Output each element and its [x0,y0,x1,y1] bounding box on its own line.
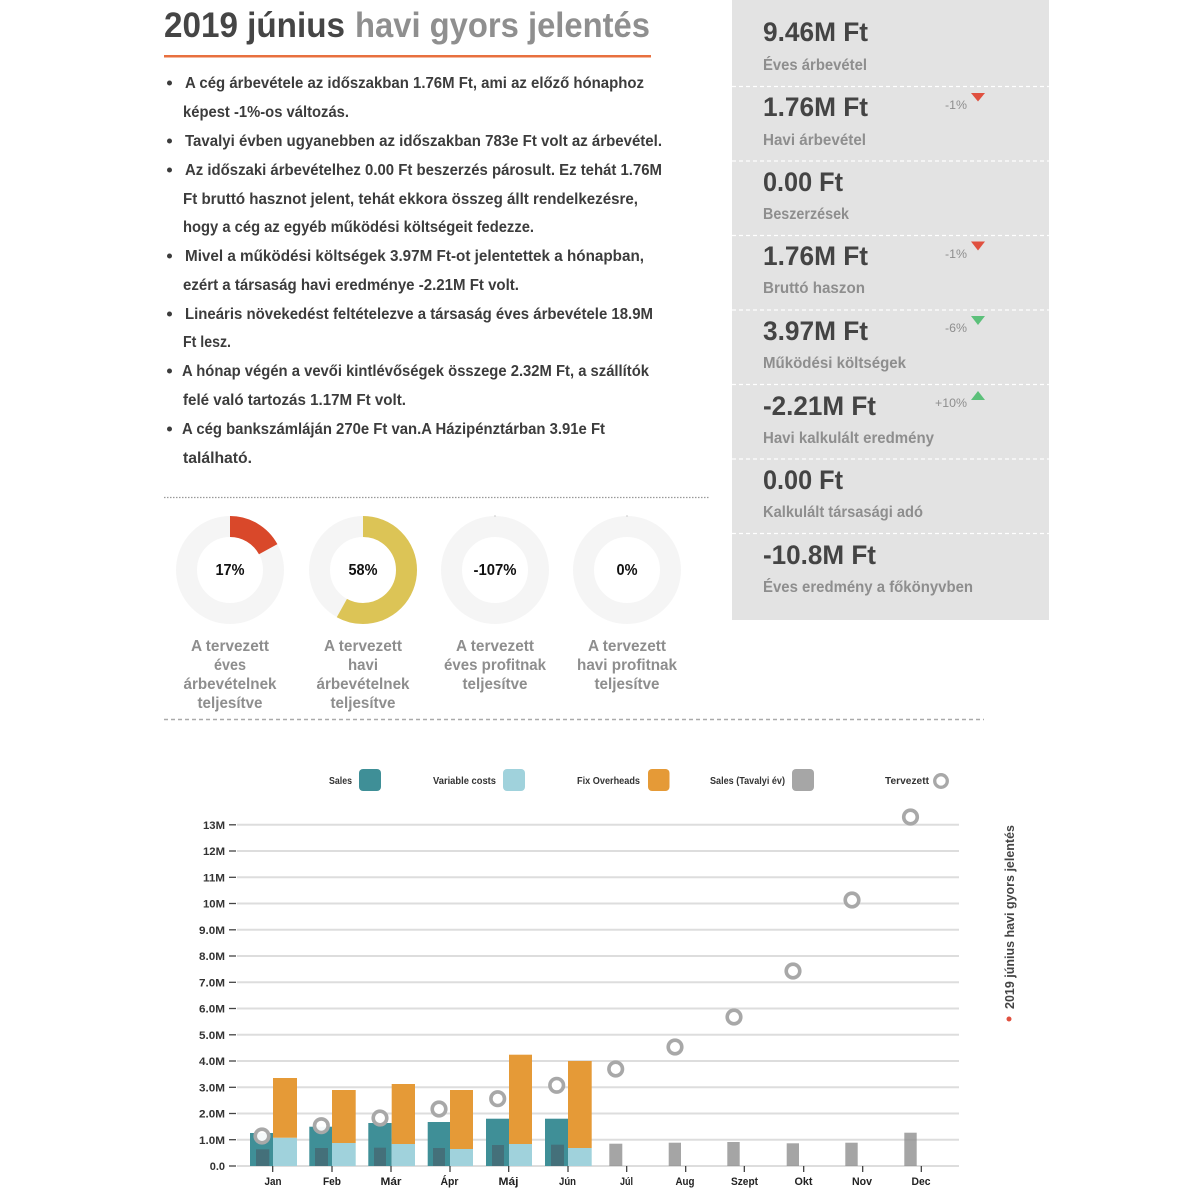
KPI: havi kalkulált eredmény: Havi kalkulált eredmény [763,430,934,447]
KPI: éves árbevétel: 9.46M Ft [763,17,868,47]
donut: havi profit 0%: 0% [616,562,638,579]
y axis gridlines and labels: 12M [203,846,225,858]
x axis labels [264,1166,930,1188]
y axis gridlines and labels: 0.0 [210,1161,225,1173]
bullet list [167,75,662,467]
title: 2019 június [164,6,345,45]
donut: éves árbevétel 17%: 17% [216,562,245,579]
KPI: éves eredmény: -10.8M Ft [763,540,876,570]
bullet list: található. [183,450,252,467]
x axis labels: Júl [620,1176,633,1188]
KPI: működési költségek [763,316,985,372]
KPI: havi árbevétel [763,92,985,149]
bullet list: Ft lesz. [183,334,231,351]
donut: éves árbevétel 17%: teljesítve [198,695,263,712]
KPI: éves eredmény [763,540,973,596]
chart legend [329,769,947,791]
bullet list: A cég árbevétele az időszakban 1.76M Ft, ami az előző hónaphoz [185,75,644,92]
donut: havi árbevétel 58%: A tervezett [324,638,403,655]
bullet list: Ft bruttó hasznot jelent, tehát ekkora összeg állt rendelkezésre, [183,191,638,208]
KPI: bruttó haszon: -1% [945,247,967,261]
KPI: beszerzések [763,167,849,223]
bullet list: Az időszaki árbevételhez 0.00 Ft beszerzés párosult. Ez tehát 1.76M [185,162,662,179]
planned markers [255,810,917,1143]
KPI: bruttó haszon: 1.76M Ft [763,241,868,271]
donut: éves árbevétel 17%: éves [214,657,246,674]
donut: havi profit 0%: A tervezett [588,638,667,655]
bullet list: Lineáris növekedést feltételezve a társaság éves árbevétele 18.9M [185,306,653,323]
KPI: működési költségek: 3.97M Ft [763,316,868,346]
KPI: éves eredmény: Éves eredmény a főkönyvben [763,577,973,596]
KPI: beszerzések: Beszerzések [763,206,849,223]
KPI: havi árbevétel: Havi árbevétel [763,132,866,149]
donut: havi árbevétel 58% [316,526,410,712]
donut: havi árbevétel 58%: árbevételnek [316,676,410,693]
donut: éves árbevétel 17%: árbevételnek [184,676,277,693]
bullet list: A cég bankszámláján 270e Ft van.A Házipénztárban 3.91e Ft [182,421,605,438]
bars: sales [250,1119,568,1166]
bars: variable costs [273,1138,592,1166]
y axis gridlines and labels: 10M [203,898,225,910]
KPI: havi kalkulált eredmény: +10% [935,396,967,410]
donut: éves árbevétel 17% [184,526,277,712]
y axis gridlines and labels [199,820,959,1173]
chart legend: Tervezett [885,776,930,787]
donut: éves profit -107%: éves profitnak [444,657,546,674]
chart legend: Sales [329,776,352,787]
x axis labels: Ápr [440,1175,459,1188]
KPI: kalkulált társasági adó: Kalkulált társasági adó [763,504,923,521]
donut: havi árbevétel 58%: teljesítve [330,695,396,712]
KPI: havi árbevétel: -1% [945,98,967,112]
y axis gridlines and labels: 9.0M [199,925,225,937]
KPI: havi árbevétel: 1.76M Ft [763,92,868,122]
bullet list: Mivel a működési költségek 3.97M Ft-ot jelentettek a hónapban, [185,248,644,265]
x axis labels: Dec [912,1176,930,1188]
y axis gridlines and labels: 13M [203,820,225,832]
y axis gridlines and labels: 5.0M [199,1030,225,1042]
y axis gridlines and labels: 7.0M [199,977,225,989]
combo chart [199,810,959,1188]
x axis labels: Aug [676,1176,694,1188]
chart legend: Fix Overheads [577,776,640,787]
chart legend: Sales (Tavalyi év) [710,776,785,787]
x axis labels: Jan [264,1176,282,1188]
donut: havi profit 0%: havi profitnak [577,657,677,674]
KPI: kalkulált társasági adó: 0.00 Ft [763,465,843,495]
donut: havi árbevétel 58%: 58% [348,562,378,579]
title: havi gyors jelentés [355,6,650,45]
KPI: havi kalkulált eredmény: -2.21M Ft [763,391,876,421]
KPI: működési költségek: -6% [945,321,967,335]
bullet list: Tavalyi évben ugyanebben az időszakban 783e Ft volt az árbevétel. [185,133,662,150]
y axis gridlines and labels: 11M [203,872,225,884]
KPI: éves árbevétel: Éves árbevétel [763,55,867,74]
bullet list: hogy a cég az egyéb működési költségeit fedezze. [183,219,534,236]
bullet list: A hónap végén a vevői kintlévőségek összege 2.32M Ft, a szállítók [182,363,649,380]
KPI: éves árbevétel [763,17,868,74]
KPI: bruttó haszon [763,241,985,297]
KPI: beszerzések: 0.00 Ft [763,167,843,197]
title [164,6,650,45]
donut: éves árbevétel 17%: A tervezett [191,638,270,655]
donut: éves profit -107%: teljesítve [462,676,528,693]
x axis labels: Máj [498,1176,518,1188]
donut: havi profit 0% [577,515,677,693]
donut: éves profit -107% [444,515,546,693]
y axis gridlines and labels: 3.0M [199,1082,225,1094]
donut: éves profit -107%: -107% [474,562,517,579]
bars: sales last year [256,1133,917,1166]
x axis labels: Okt [794,1176,813,1188]
KPI: havi kalkulált eredmény [763,391,985,447]
panel: KPI [732,0,1049,620]
y axis gridlines and labels: 8.0M [199,951,225,963]
KPI: bruttó haszon: Bruttó haszon [763,280,865,297]
x axis labels: Már [380,1176,402,1188]
KPI: működési költségek: Működési költségek [763,355,906,372]
y axis gridlines and labels: 6.0M [199,1004,225,1016]
chart legend: Variable costs [433,776,496,787]
donut: havi profit 0%: teljesítve [594,676,660,693]
bars: fix overheads [273,1055,592,1149]
y axis gridlines and labels: 1.0M [199,1135,225,1147]
donut: havi árbevétel 58%: havi [348,657,378,674]
donut: éves profit -107%: A tervezett [456,638,535,655]
vertical side label: 2019 június havi gyors jelentés [1002,825,1017,1009]
bullet list: képest -1%-os változás. [183,104,349,121]
x axis labels: Jún [559,1176,576,1188]
y axis gridlines and labels: 4.0M [199,1056,225,1068]
y axis gridlines and labels: 2.0M [199,1108,225,1120]
KPI: kalkulált társasági adó [763,465,923,521]
bullet list: ezért a társaság havi eredménye -2.21M Ft volt. [183,277,519,294]
x axis labels: Feb [323,1176,341,1188]
x axis labels: Nov [852,1176,873,1188]
x axis labels: Szept [731,1176,758,1188]
bullet list: felé való tartozás 1.17M Ft volt. [183,392,406,409]
